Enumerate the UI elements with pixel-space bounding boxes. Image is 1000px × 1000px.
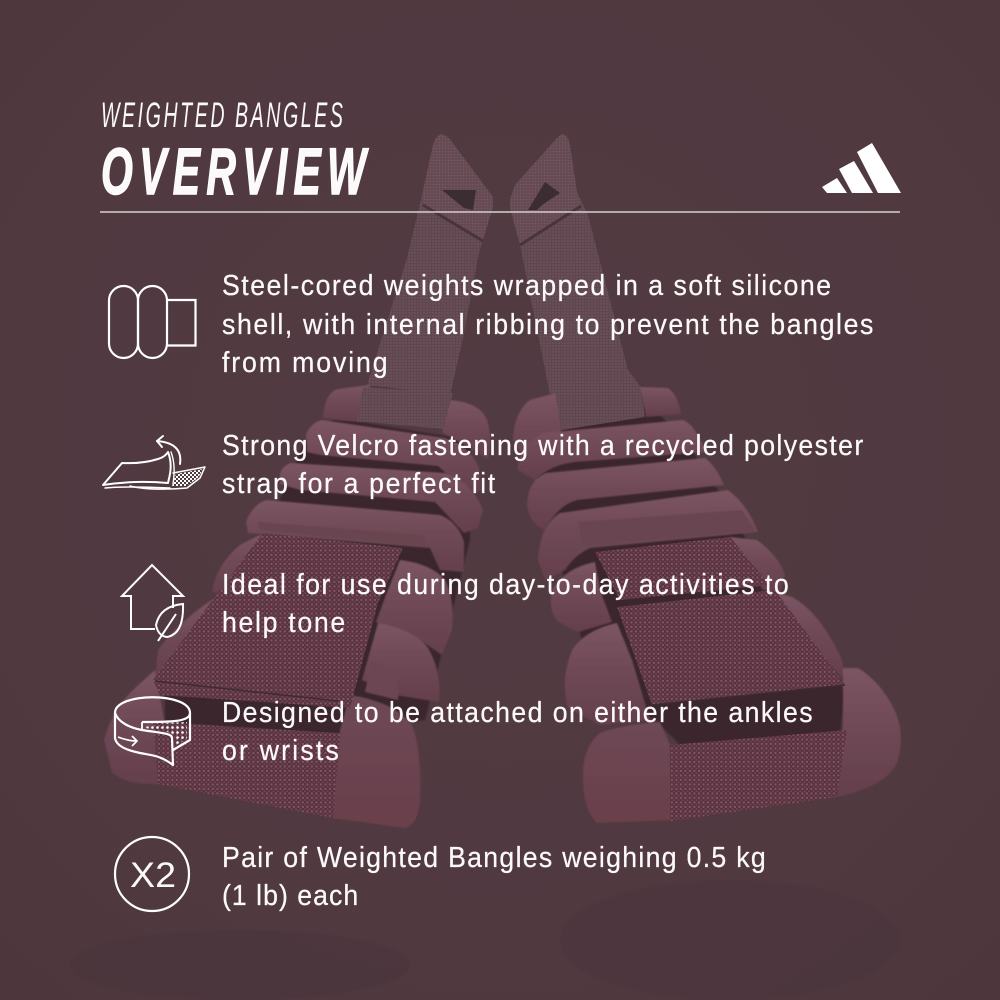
title: OVERVIEW — [101, 134, 369, 208]
text: ankles or wrists: Designed to be attached on either the ankles — [222, 696, 813, 728]
text: steel core: from moving — [222, 346, 388, 378]
adidas logo — [822, 143, 901, 193]
icon: x2 badge: X2 — [130, 856, 176, 895]
feature 2 — [103, 429, 863, 499]
feature 4 — [115, 696, 813, 766]
text: pair: Pair of Weighted Bangles weighing 0.5 kg — [222, 841, 766, 873]
heading block — [101, 96, 369, 208]
text: steel core: shell, with internal ribbing to prevent the bangles — [222, 308, 873, 340]
inner side bumps — [551, 562, 672, 823]
strap tip — [510, 134, 581, 245]
row B block — [518, 420, 707, 480]
left bangle — [104, 134, 493, 828]
upper strap — [510, 134, 643, 394]
floor shadow — [70, 880, 900, 1000]
text: ankles or wrists: or wrists — [222, 734, 339, 766]
icon: house with leaf — [122, 565, 183, 641]
right bangle — [510, 134, 901, 823]
patch stitch line — [652, 685, 845, 705]
strap tip — [422, 134, 493, 240]
row C block — [527, 458, 724, 530]
stitching — [423, 205, 483, 241]
inner side bumps — [332, 560, 453, 828]
text: steel core: Steel-cored weights wrapped in a soft silicone — [222, 269, 831, 301]
text: velcro — [222, 429, 863, 499]
header rule — [100, 211, 900, 213]
lower velcro patch — [617, 590, 845, 705]
feature 5 — [115, 837, 766, 911]
row A side pieces — [323, 385, 490, 460]
outer bumps — [104, 532, 265, 784]
upper strap — [367, 134, 493, 395]
text: day-to-day: Ideal for use during day-to-day activities to — [222, 568, 789, 600]
icon: x2 badge — [115, 837, 189, 911]
row D block — [538, 490, 758, 580]
subtitle: WEIGHTED BANGLES — [101, 96, 343, 136]
feature 3 — [122, 565, 789, 641]
text: steel core — [222, 269, 873, 378]
dark backing — [165, 418, 470, 735]
dark backing — [525, 405, 845, 745]
lower strap — [153, 722, 340, 818]
row C block — [280, 463, 483, 533]
outer bumps — [730, 537, 901, 797]
strap logo — [528, 182, 560, 210]
upper velcro patch — [222, 533, 403, 603]
feature 1 — [109, 269, 873, 378]
strap loop — [357, 387, 453, 429]
text: day-to-day: help tone — [222, 606, 345, 638]
row D block — [246, 500, 464, 572]
patch stitch line — [155, 681, 338, 701]
row B block — [306, 420, 482, 495]
row A side pieces — [513, 387, 681, 470]
strap loop — [555, 387, 645, 430]
stitching — [520, 206, 581, 245]
strap logo — [442, 190, 476, 210]
lower strap — [670, 730, 847, 821]
upper velcro patch — [595, 537, 770, 600]
text: pair: (1 lb) each — [222, 879, 358, 911]
icon: velcro fabric — [103, 436, 205, 489]
icon: wrap band — [115, 697, 190, 765]
text: pair — [222, 841, 766, 911]
text: velcro: strap for a perfect fit — [222, 467, 495, 499]
lower velcro patch — [153, 590, 378, 708]
text: velcro: Strong Velcro fastening with a recycled polyester — [222, 429, 863, 461]
text: day-to-day — [222, 568, 789, 638]
text: ankles or wrists — [222, 696, 813, 766]
product photo: pair of weighted bangles — [104, 134, 901, 828]
icon: bangle segments — [109, 286, 196, 358]
